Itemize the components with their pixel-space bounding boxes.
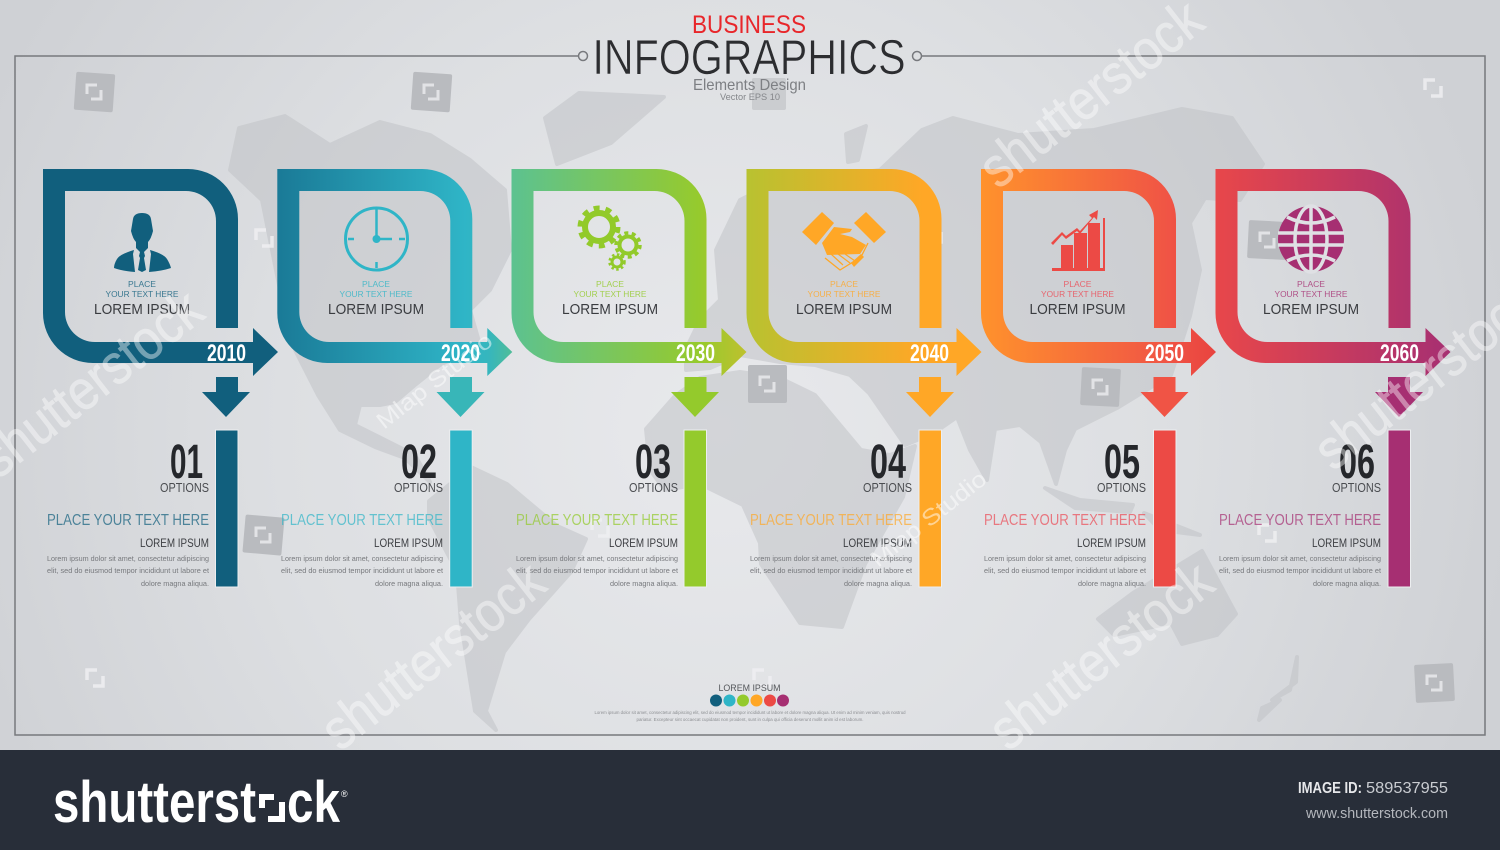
- option 04 text: Lorem ipsum dolor sit amet, consectetur adipiscing: [750, 554, 912, 563]
- image id: www.shutterstock.com: [1305, 806, 1448, 822]
- option 01 text: PLACE YOUR TEXT HERE: [47, 512, 209, 529]
- module 3 labels: LOREM IPSUM: [562, 301, 658, 318]
- option 01 text: Lorem ipsum dolor sit amet, consectetur adipiscing: [47, 554, 209, 563]
- option 06 text: OPTIONS: [1332, 481, 1381, 495]
- option 03 text: [516, 436, 679, 588]
- module 4 labels: YOUR TEXT HERE: [808, 289, 881, 299]
- option 05 text: elit, sed do eiusmod tempor incididunt ut labore et: [984, 566, 1147, 575]
- icon: businessman: [114, 213, 171, 272]
- icon: globe: [1278, 206, 1344, 272]
- down arrows: [202, 377, 1423, 417]
- module 3 labels: [562, 279, 715, 367]
- option 06 text: elit, sed do eiusmod tempor incididunt ut labore et: [1219, 566, 1382, 575]
- module 4 labels: [796, 279, 949, 367]
- module 4 connector arrow: [746, 169, 982, 376]
- module 1 labels: 2010: [207, 340, 246, 367]
- module 2 labels: PLACE: [362, 279, 390, 289]
- module 1 connector arrow: [43, 169, 278, 376]
- module 6 connector arrow: [1216, 169, 1450, 376]
- module 3 labels: YOUR TEXT HERE: [574, 289, 647, 299]
- title: Vector EPS 10: [720, 92, 780, 103]
- option 05 text: 05: [1104, 436, 1140, 489]
- option 03 text: elit, sed do eiusmod tempor incididunt ut labore et: [516, 566, 679, 575]
- option 05 text: LOREM IPSUM: [1077, 538, 1146, 550]
- module 4 labels: 2040: [910, 340, 949, 367]
- module 6 labels: [1263, 279, 1419, 367]
- image id: IMAGE ID:: [1298, 780, 1362, 797]
- watermarks: shutterstock: [977, 548, 1225, 761]
- option 01 text: 01: [170, 436, 203, 489]
- option 06 text: 06: [1339, 436, 1375, 489]
- option 01 text: OPTIONS: [160, 481, 209, 495]
- title: INFOGRAPHICS: [592, 31, 906, 85]
- option 05 text: PLACE YOUR TEXT HERE: [984, 512, 1146, 529]
- module 5 labels: 2050: [1145, 340, 1184, 367]
- option 01 text: elit, sed do eiusmod tempor incididunt ut labore et: [47, 566, 210, 575]
- world map: [230, 93, 1297, 730]
- legend: Lorem ipsum dolor sit amet, consectetur adipiscing elit, sed do eiusmod tempor incididunt ut labore et dolore magna aliqua. Ut enim ad minim veniam, quis nostrud: [594, 710, 906, 715]
- title: Elements Design: [693, 77, 806, 94]
- option 03 text: 03: [635, 436, 671, 489]
- option 02 text: 02: [401, 436, 437, 489]
- module 6 labels: 2060: [1380, 340, 1419, 367]
- icon: handshake: [802, 212, 886, 270]
- module 1 labels: [94, 279, 246, 367]
- option 05 text: [984, 436, 1147, 588]
- option 03 text: PLACE YOUR TEXT HERE: [516, 512, 678, 529]
- option 02 text: dolore magna aliqua.: [375, 579, 443, 588]
- title: [592, 11, 906, 103]
- module 6 labels: LOREM IPSUM: [1263, 301, 1359, 318]
- legend: pariatur. Excepteur sint occaecat cupidatat non proident, sunt in culpa qui officia deserunt mollit anim id est laborum.: [636, 717, 864, 722]
- option 02 text: [281, 436, 444, 588]
- image id: [1298, 780, 1448, 822]
- module 1 labels: LOREM IPSUM: [94, 301, 190, 318]
- module 5 labels: YOUR TEXT HERE: [1041, 289, 1114, 299]
- image id: 589537955: [1366, 780, 1448, 797]
- module 5 labels: [1030, 279, 1184, 367]
- module 6 labels: YOUR TEXT HERE: [1274, 289, 1348, 299]
- option 03 text: OPTIONS: [629, 481, 678, 495]
- module 1 labels: YOUR TEXT HERE: [106, 289, 179, 299]
- module 2 labels: LOREM IPSUM: [328, 301, 424, 318]
- option 06 text: dolore magna aliqua.: [1313, 579, 1381, 588]
- option 02 text: LOREM IPSUM: [374, 538, 443, 550]
- option 04 text: LOREM IPSUM: [843, 538, 912, 550]
- option 05 text: dolore magna aliqua.: [1078, 579, 1146, 588]
- watermarks: Mlap Studio: [371, 327, 497, 434]
- option 01 text: LOREM IPSUM: [140, 538, 209, 550]
- option 02 text: OPTIONS: [394, 481, 443, 495]
- title: BUSINESS: [692, 11, 806, 39]
- icon: gears: [580, 208, 640, 270]
- option 06 text: Lorem ipsum dolor sit amet, consectetur adipiscing: [1219, 554, 1381, 563]
- module 3 connector arrow: [512, 169, 746, 376]
- module 2 labels: 2020: [441, 340, 480, 367]
- footer logo: ck: [287, 770, 341, 835]
- icon: growth chart: [1051, 210, 1105, 271]
- module 5 connector arrow: [981, 169, 1216, 376]
- module 2 labels: YOUR TEXT HERE: [340, 289, 413, 299]
- icon: clock: [346, 208, 408, 270]
- option 02 text: PLACE YOUR TEXT HERE: [281, 512, 443, 529]
- module 5 labels: PLACE: [1064, 279, 1092, 289]
- option 02 text: Lorem ipsum dolor sit amet, consectetur adipiscing: [281, 554, 443, 563]
- module 4 labels: PLACE: [830, 279, 858, 289]
- legend: [594, 683, 906, 722]
- module 3 labels: PLACE: [596, 279, 624, 289]
- module 4 labels: LOREM IPSUM: [796, 301, 892, 318]
- option 03 text: Lorem ipsum dolor sit amet, consectetur adipiscing: [516, 554, 678, 563]
- module 1 labels: PLACE: [128, 279, 156, 289]
- module 2 connector arrow: [277, 169, 512, 376]
- option 06 text: [1219, 436, 1382, 588]
- option 04 text: [750, 436, 913, 588]
- option 03 text: dolore magna aliqua.: [610, 579, 678, 588]
- option 04 text: dolore magna aliqua.: [844, 579, 912, 588]
- watermarks: shutterstock: [309, 548, 557, 761]
- watermark logo squares: [74, 72, 1455, 703]
- option 04 text: PLACE YOUR TEXT HERE: [750, 512, 912, 529]
- option 05 text: OPTIONS: [1097, 481, 1146, 495]
- footer logo: ®: [341, 789, 348, 799]
- option 05 text: Lorem ipsum dolor sit amet, consectetur adipiscing: [984, 554, 1146, 563]
- legend: LOREM IPSUM: [718, 683, 780, 693]
- option 01 text: [47, 436, 210, 588]
- option 02 text: elit, sed do eiusmod tempor incididunt ut labore et: [281, 566, 444, 575]
- footer bar: [0, 750, 1500, 850]
- option 06 text: PLACE YOUR TEXT HERE: [1219, 512, 1381, 529]
- frame: [15, 52, 1485, 735]
- module 2 labels: [328, 279, 480, 367]
- option 04 text: elit, sed do eiusmod tempor incididunt ut labore et: [750, 566, 913, 575]
- module 6 labels: PLACE: [1297, 279, 1325, 289]
- watermarks: Mlap Studio: [865, 465, 991, 572]
- module 3 labels: 2030: [676, 340, 715, 367]
- vertical bars: [216, 430, 1410, 587]
- option 04 text: OPTIONS: [863, 481, 912, 495]
- option 01 text: dolore magna aliqua.: [141, 579, 209, 588]
- option 06 text: LOREM IPSUM: [1312, 538, 1381, 550]
- option 04 text: 04: [870, 436, 906, 489]
- option 03 text: LOREM IPSUM: [609, 538, 678, 550]
- footer logo: shutterst: [53, 770, 256, 835]
- module 5 labels: LOREM IPSUM: [1030, 301, 1126, 318]
